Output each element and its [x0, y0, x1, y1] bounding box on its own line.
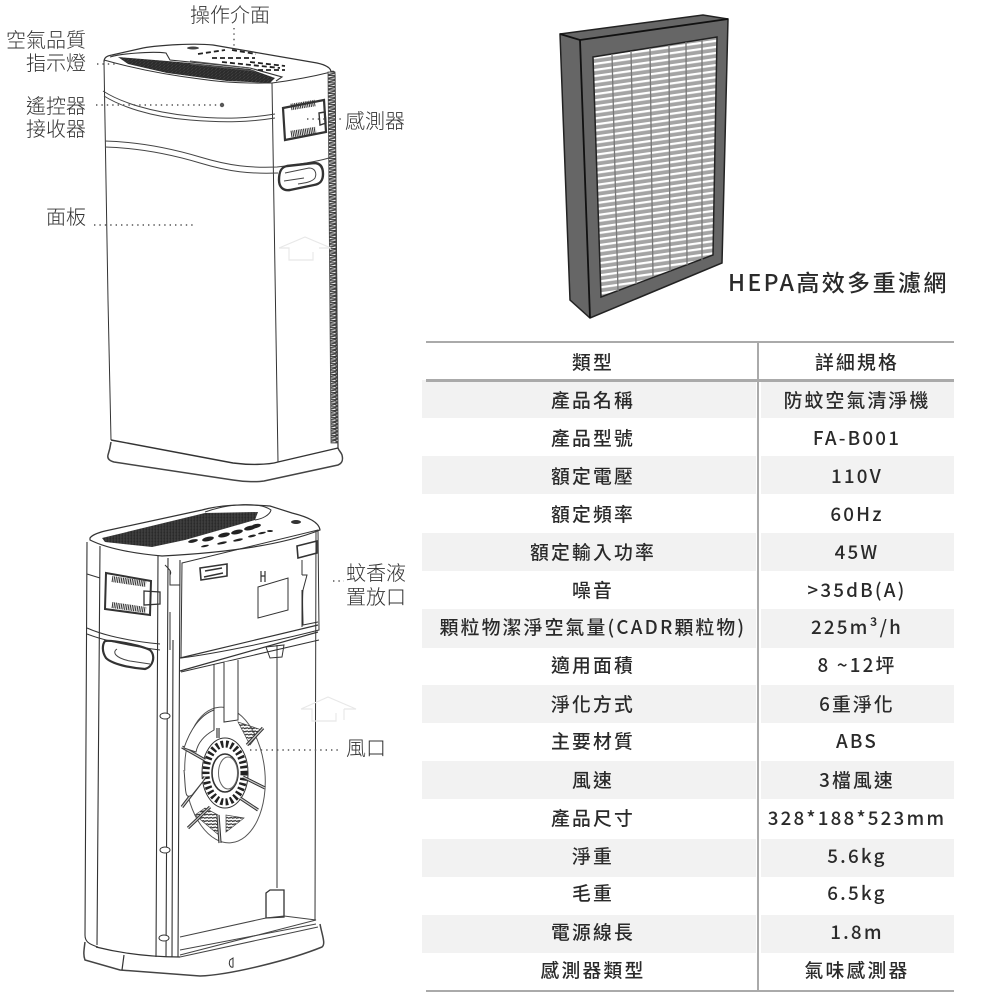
specification table: 6.5kg: [827, 879, 887, 906]
specification table: 淨重: [572, 842, 614, 869]
label: 蚊香液置放口: [346, 557, 406, 610]
specification table: 1.8m: [830, 918, 884, 945]
specification table: 8 ~12坪: [817, 651, 897, 678]
label: 面板: 面板: [46, 201, 86, 230]
specification table: 淨化方式: [551, 690, 635, 717]
specification table: 額定頻率: [551, 500, 635, 527]
label: 遙控器接收器: 遙控器: [26, 90, 86, 119]
specification table: 顆粒物潔淨空氣量(CADR顆粒物): [440, 613, 746, 640]
specification table: 110V: [831, 462, 883, 489]
specification table: 產品型號: [551, 424, 635, 451]
watermark: house icon lower: [301, 696, 356, 722]
label: 空氣品質指示燈: 指示燈: [26, 47, 86, 76]
specification table: 產品尺寸: [551, 804, 635, 831]
specification table: 產品名稱: [551, 386, 635, 413]
specification table: 45W: [835, 538, 879, 565]
specification table: 感測器類型: [541, 956, 645, 983]
label: 空氣品質指示燈: [6, 24, 86, 76]
specification table: 電源線長: [551, 918, 635, 945]
label: 空氣品質指示燈: 空氣品質: [6, 24, 86, 53]
specification table: 毛重: [572, 879, 614, 906]
illustration: rear open view of air purifier: [83, 504, 324, 977]
specification table: 60Hz: [830, 500, 884, 527]
illustration: front view of air purifier: [102, 44, 344, 482]
specification table: 225m³/h: [811, 613, 903, 640]
specification table: 6重淨化: [819, 690, 895, 717]
specification table: FA-B001: [813, 424, 901, 451]
specification table: 詳細規格: [815, 348, 899, 375]
specification table: 3檔風速: [819, 766, 895, 793]
label: 遙控器接收器: [26, 90, 86, 142]
specification table: 噪音: [572, 576, 614, 603]
icon: fan: [179, 660, 271, 846]
specification table: 5.6kg: [827, 842, 887, 869]
label: 蚊香液置放口: 置放口: [346, 581, 406, 610]
specification table: >35dB(A): [807, 576, 907, 603]
specification table: ABS: [836, 727, 878, 754]
specification table: 適用面積: [551, 651, 635, 678]
label: 遙控器接收器: 接收器: [26, 113, 86, 142]
specification table: 額定電壓: [551, 462, 635, 489]
specification table: 風速: [572, 766, 614, 793]
specification table: 主要材質: [551, 727, 635, 754]
label: 風口: 風口: [346, 732, 386, 761]
label: 感測器: 感測器: [345, 105, 405, 134]
caption: HEPA高效多重濾網: HEPA高效多重濾網: [728, 264, 949, 298]
illustration: HEPA filter: [559, 14, 729, 319]
specification table: 額定輸入功率: [530, 538, 656, 565]
watermark: house icon upper: [279, 236, 332, 260]
callout dotted leader lines: [94, 28, 344, 751]
specification table: 328*188*523mm: [768, 804, 946, 831]
specification table: 類型: [572, 348, 614, 375]
specification table: 氣味感測器: [805, 956, 909, 983]
label: 蚊香液置放口: 蚊香液: [346, 557, 406, 586]
control buttons: [188, 523, 273, 548]
specification table: 防蚊空氣清淨機: [784, 386, 930, 413]
